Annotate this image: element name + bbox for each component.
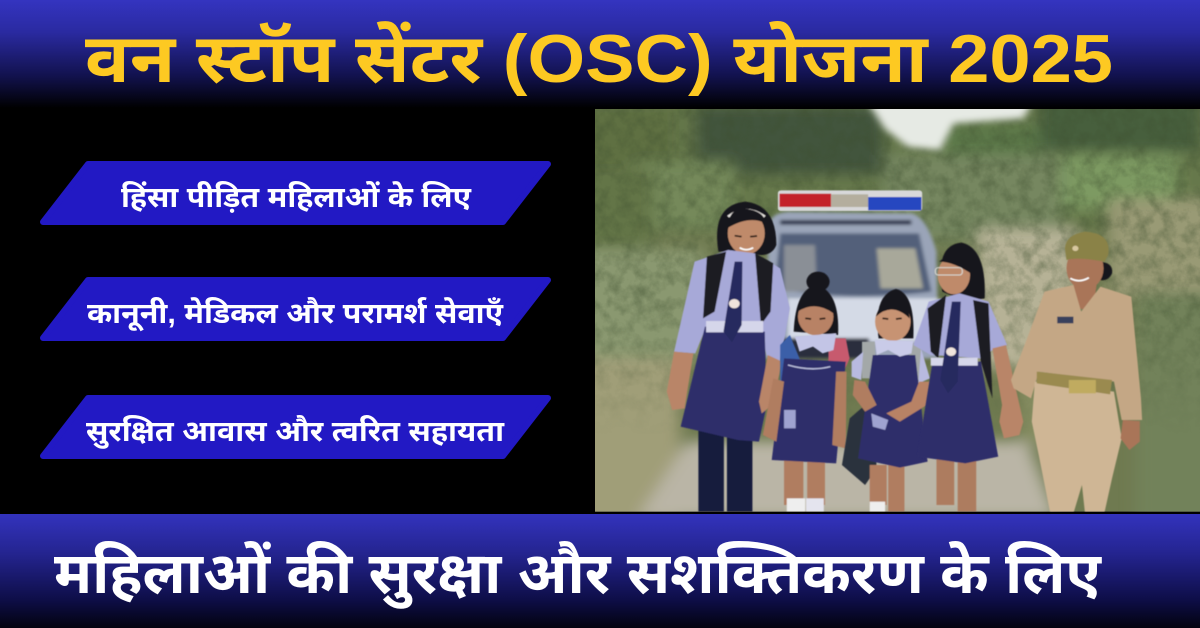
- title: वन स्टॉप सेंटर (OSC) योजना 2025: [85, 21, 1113, 97]
- label: legal, medical and counselling services: [43, 280, 548, 338]
- girl 1: [667, 202, 790, 512]
- girl 2: [763, 272, 850, 512]
- label: for women victims of violence: हिंसा पीड़ित महिलाओं के लिए: [121, 180, 472, 214]
- header band: [0, 0, 1200, 108]
- footer slogan: महिलाओं की सुरक्षा और सशक्तिकरण के लिए: [54, 541, 1103, 609]
- girl 4: [913, 243, 1023, 512]
- label: safe shelter and quick help: सुरक्षित आवास और त्वरित सहायता: [86, 415, 504, 449]
- label: legal, medical and counselling services: कानूनी, मेडिकल और परामर्श सेवाएँ: [87, 296, 504, 331]
- label: safe shelter and quick help: [43, 398, 548, 456]
- policewoman: [1011, 232, 1142, 513]
- light bar: [778, 190, 922, 211]
- footer band: [0, 514, 1200, 628]
- label: for women victims of violence: [43, 164, 548, 222]
- photo: schoolgirls walking with a policewoman, police car behind: [595, 109, 1200, 512]
- panel: feature labels: [40, 161, 551, 459]
- foliage texture: [595, 109, 1200, 409]
- girl 3: [842, 289, 930, 512]
- sky gap: [865, 109, 1036, 154]
- police car: [765, 212, 938, 358]
